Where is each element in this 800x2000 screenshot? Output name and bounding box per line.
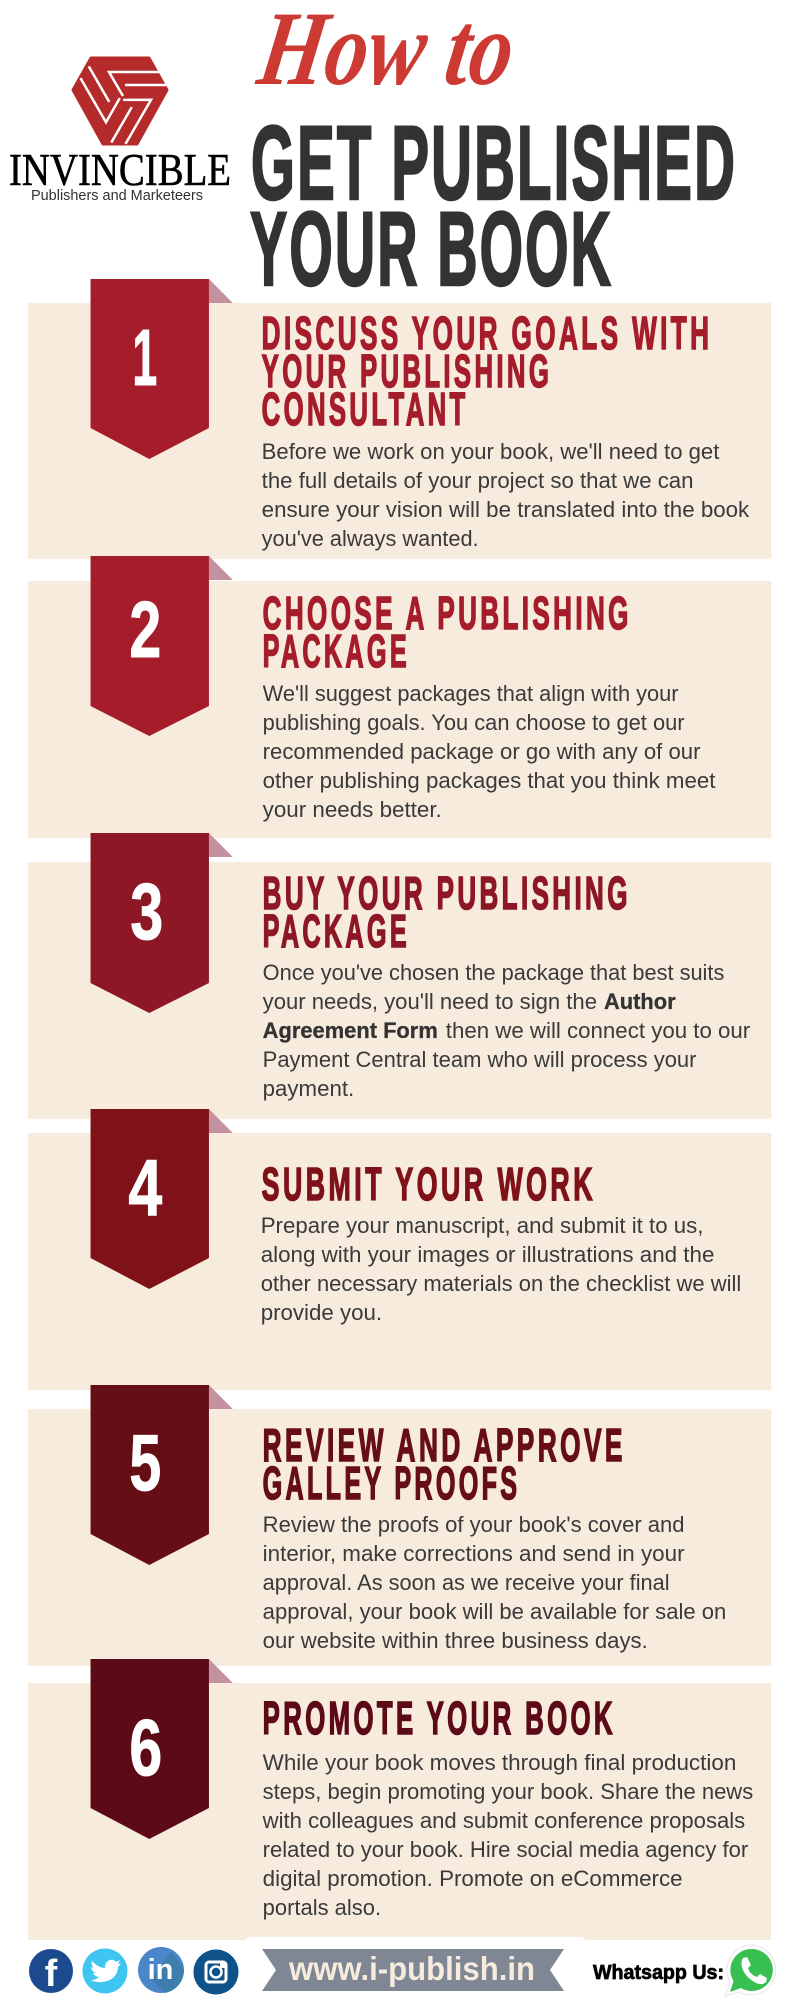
ribbon: number 2: 2 (129, 585, 161, 674)
ribbon: number 3: 3 (130, 867, 163, 956)
panel background (28, 1133, 771, 1390)
ribbon: number 4 (91, 1109, 233, 1289)
panel: step 6 (28, 1659, 771, 1940)
body text: step 1: Before we work on your book, we'll need to get (262, 439, 720, 464)
body text: step 1: you've always wanted. (262, 526, 479, 551)
icon: logo emblem (73, 58, 167, 149)
body text: step 4: other necessary materials on the checklist we will (261, 1271, 741, 1296)
body text: step 3: Once you've chosen the package that best suits (263, 960, 724, 985)
body text: step 3: your needs, you'll need to sign the (263, 989, 597, 1014)
heading: step 3: PACKAGE (263, 905, 410, 957)
ribbon: number 6 (91, 1659, 233, 1839)
logo wordmark: INVINCIBLE (9, 144, 231, 195)
footer white tab (245, 1937, 586, 2000)
ribbon: number 4: 4 (128, 1143, 162, 1232)
body text: step 3: Payment Central team who will process your (263, 1047, 697, 1072)
body text: step 2: recommended package or go with any of our (263, 739, 701, 764)
ribbon: number 3 (91, 833, 233, 1013)
body text: step 6: with colleagues and submit conference proposals (262, 1808, 745, 1833)
logo tagline: Publishers and Marketeers (31, 187, 203, 204)
body text: step 4: along with your images or illustrations and the (261, 1242, 714, 1267)
icon: linkedin: in (148, 1954, 173, 1986)
body text: step 3: Agreement Form (263, 1018, 438, 1043)
panel: step 5 (28, 1385, 771, 1666)
website banner: www.i-publish.in (288, 1950, 535, 1987)
body text: step 6: digital promotion. Promote on eCommerce (263, 1866, 683, 1891)
icon: linkedin (138, 1947, 184, 1993)
panel background (28, 862, 771, 1119)
heading: step 2 (263, 587, 632, 677)
body text: step 5: approval. As soon as we receive your final (263, 1570, 670, 1595)
body text: step 6 (262, 1750, 753, 1920)
panel: step 4 (28, 1109, 771, 1390)
panel background (28, 303, 771, 559)
body text: step 3 (263, 960, 751, 1101)
icon: twitter (82, 1948, 128, 1994)
steps group (28, 279, 771, 1940)
body text: step 2: your needs better. (263, 797, 442, 822)
heading: step 5 (263, 1419, 626, 1509)
body text: step 1: the full details of your project so that we can (262, 468, 694, 493)
ribbon: number 5: 5 (129, 1418, 161, 1507)
title: Get Published Your Book (250, 105, 737, 308)
body text: step 2: other publishing packages that you think meet (263, 768, 716, 793)
heading: step 3 (263, 867, 631, 957)
logo: Invincible Publishers and Marketeers (9, 58, 231, 204)
body text: step 6: While your book moves through final production (263, 1750, 736, 1775)
body text: step 4 (261, 1213, 741, 1325)
body text: step 3: then we will connect you to our (446, 1018, 751, 1043)
body text: step 4: Prepare your manuscript, and submit it to us, (261, 1213, 703, 1238)
ribbon: number 5 (91, 1385, 233, 1565)
body text: step 1 (262, 439, 750, 551)
panel background (28, 581, 771, 838)
whatsapp label: Whatsapp Us: (593, 1961, 724, 1984)
body text: step 2: We'll suggest packages that align with your (263, 681, 679, 706)
panel: step 3 (28, 833, 771, 1119)
icon: whatsapp (725, 1945, 776, 1996)
body text: step 6: steps, begin promoting your book. Share the news (263, 1779, 753, 1804)
heading: step 2: PACKAGE (263, 625, 410, 677)
body text: step 5: our website within three business days. (263, 1628, 648, 1653)
heading: step 1 (262, 307, 712, 435)
ribbon: number 1: 1 (132, 313, 157, 402)
body text: step 1: ensure your vision will be translated into the book (262, 497, 750, 522)
body text: step 3: payment. (263, 1076, 354, 1101)
ribbon: number 6: 6 (129, 1703, 162, 1792)
body text: step 2 (263, 681, 716, 822)
footer (29, 1937, 776, 2000)
heading: step 1: CONSULTANT (262, 383, 469, 435)
body text: step 6: related to your book. Hire social media agency for (263, 1837, 749, 1862)
icon: instagram (194, 1950, 238, 1994)
panel background (28, 1683, 771, 1940)
panel background (28, 1409, 771, 1666)
body text: step 4: provide you. (261, 1300, 382, 1325)
body text: step 5: interior, make corrections and send in your (263, 1541, 685, 1566)
body text: step 5: Review the proofs of your book's cover and (263, 1512, 685, 1537)
ribbon: number 2 (91, 556, 233, 736)
ribbon: number 1 (91, 279, 233, 459)
heading: step 5: GALLEY PROOFS (263, 1457, 520, 1509)
body text: step 5: approval, your book will be available for sale on (263, 1599, 726, 1624)
icon: facebook (29, 1949, 73, 1995)
icon: facebook: f (45, 1953, 58, 1995)
body text: step 6: portals also. (263, 1895, 381, 1920)
body text: step 2: publishing goals. You can choose to get our (263, 710, 685, 735)
body text: step 5 (263, 1512, 726, 1653)
panel: step 2 (28, 556, 771, 838)
panel: step 1 (28, 279, 771, 559)
body text: step 3: Author (604, 989, 676, 1014)
heading: step 1: YOUR PUBLISHING (262, 345, 552, 397)
